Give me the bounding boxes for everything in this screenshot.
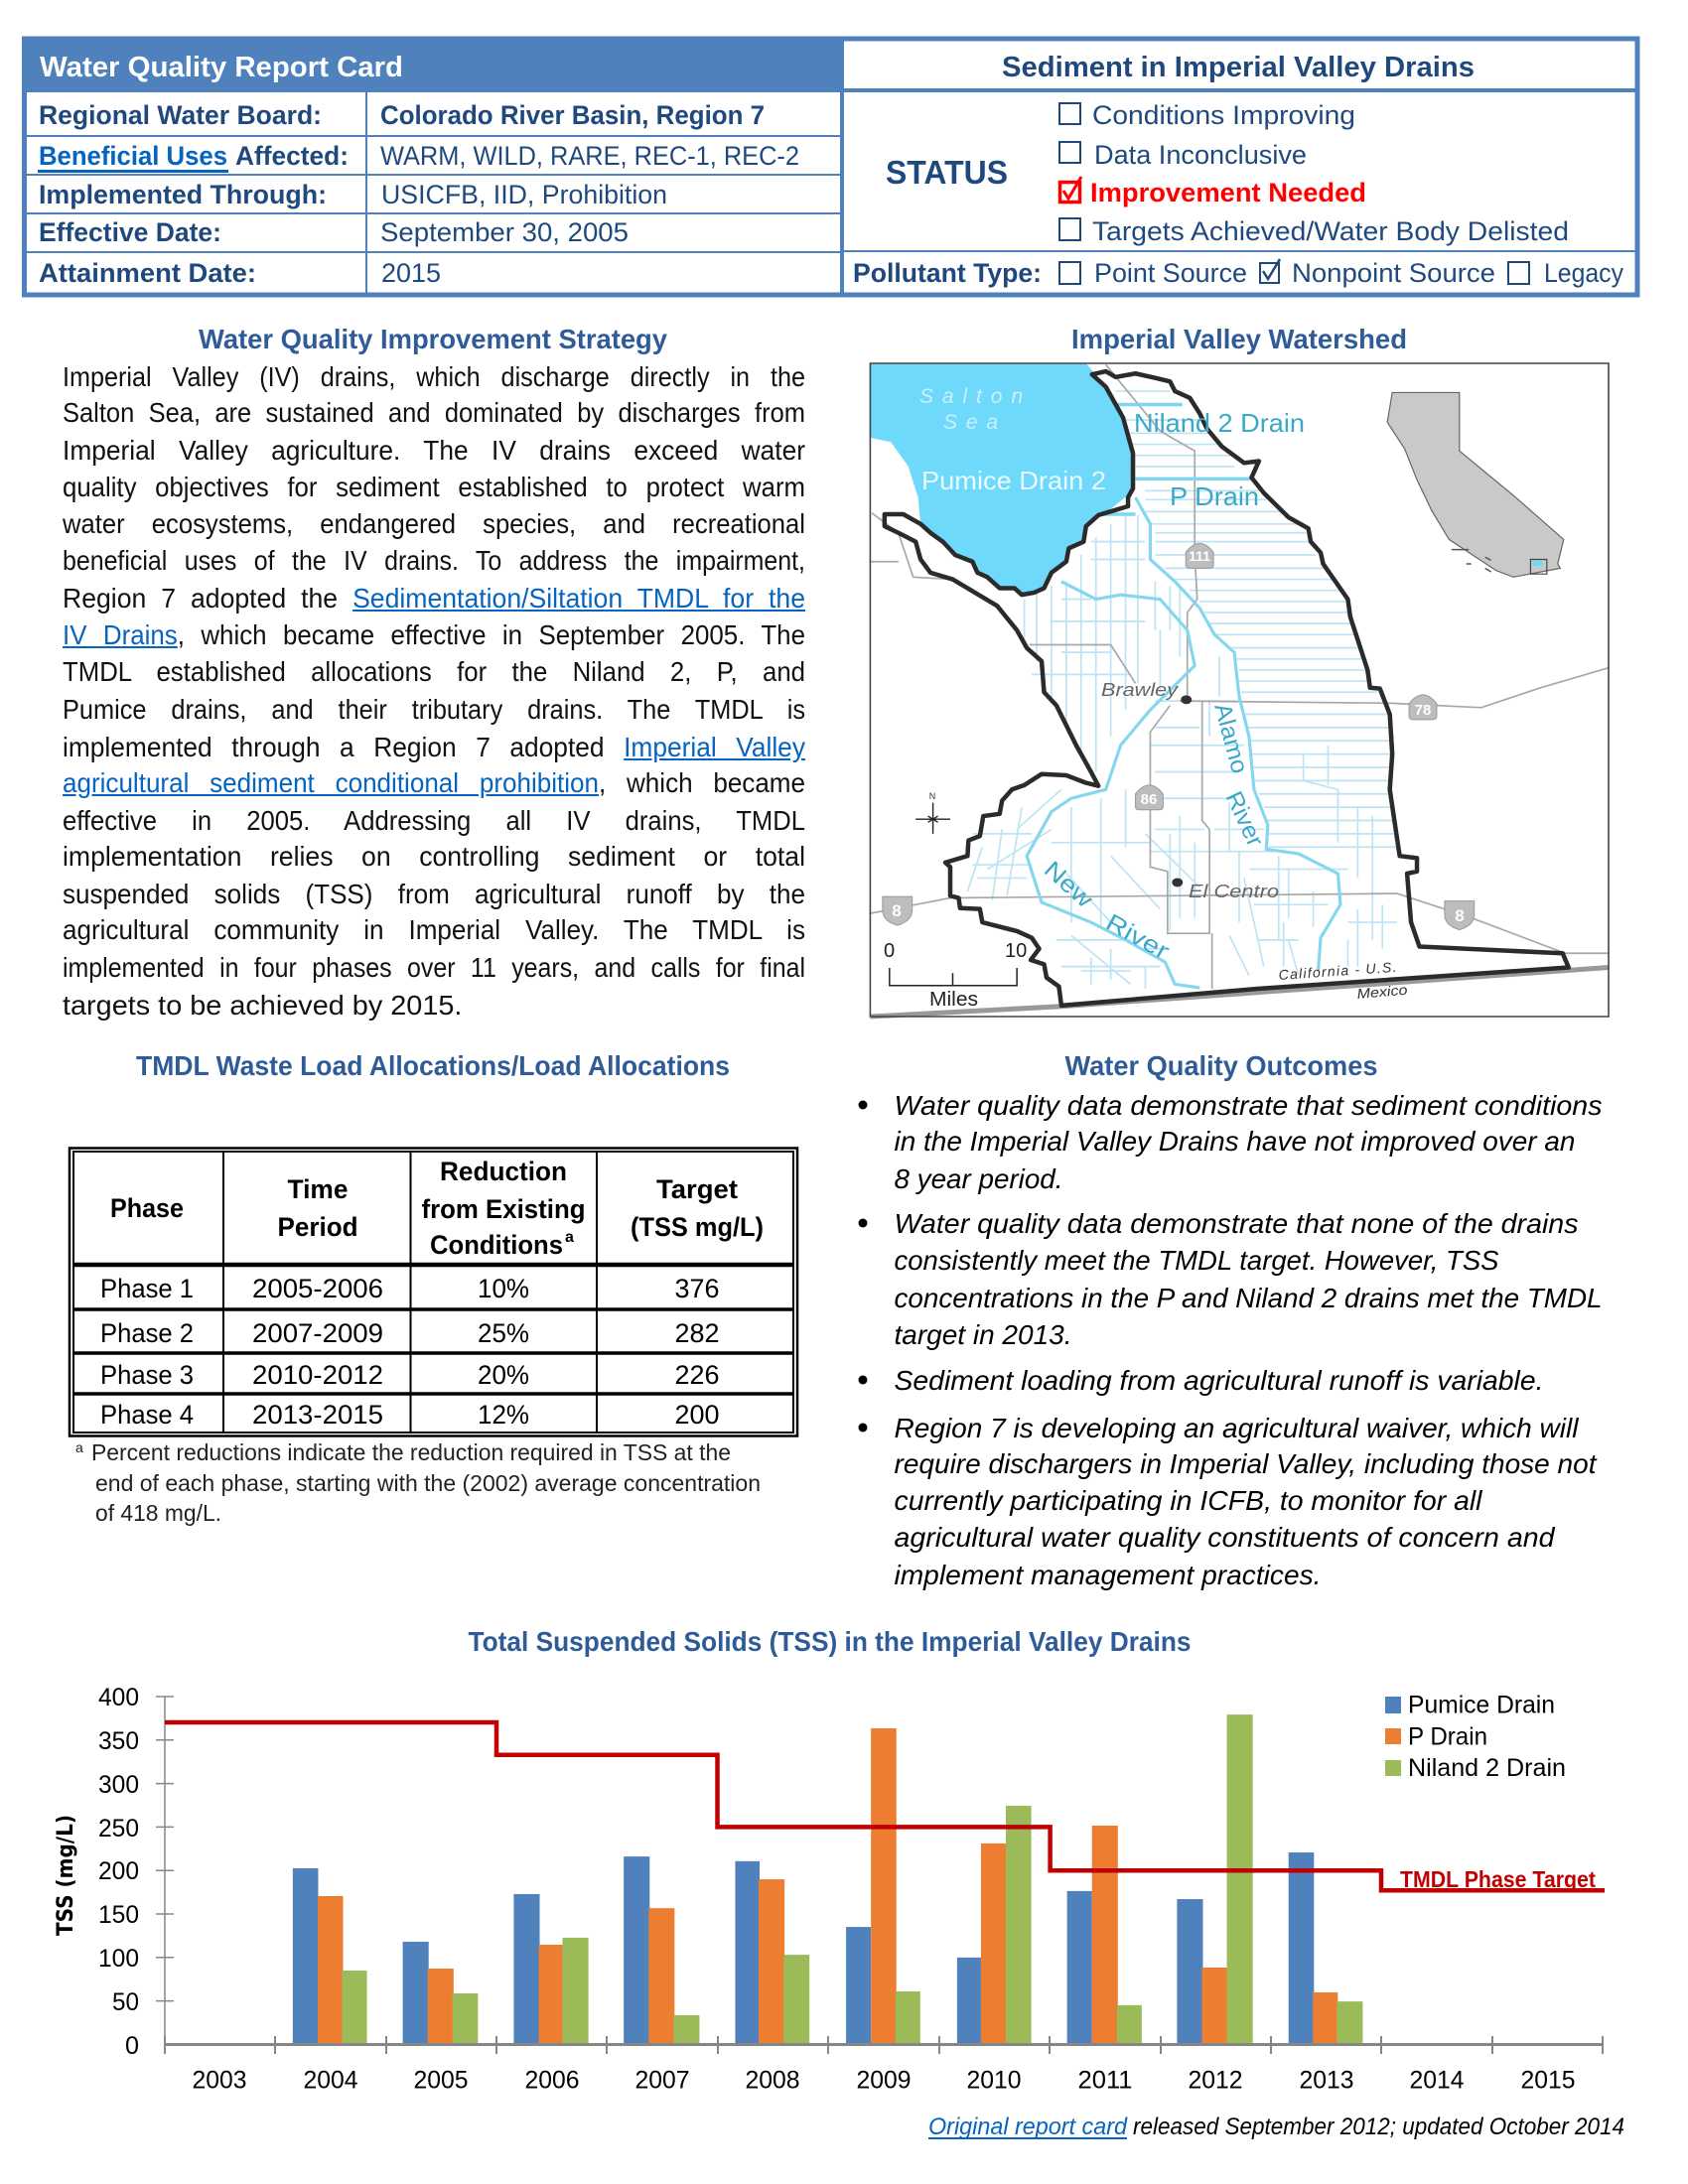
status options: Targets Achieved/Water Body Delisted (1092, 216, 1569, 246)
watershed map (870, 363, 1609, 1017)
map labels: Pumice Drain 2 (921, 466, 1106, 495)
outcome 4: Region 7 is developing an agricultural waiver, which will (894, 1413, 1579, 1443)
outcome 4: agricultural water quality constituents of concern and (894, 1522, 1556, 1553)
strategy body text: agricultural community in Imperial Valley. The TMDL is (63, 914, 805, 945)
outcome 4: implement management practices. (894, 1560, 1321, 1590)
details table: WARM, WILD, RARE, REC-1, REC-2 (380, 141, 799, 171)
map base drawing (870, 363, 1609, 1017)
border line (870, 968, 1609, 1017)
map labels (884, 385, 1465, 1011)
heading: watershed: Imperial Valley Watershed (1071, 324, 1407, 354)
map labels: Alamo (1208, 701, 1253, 776)
strategy body text: agricultural sediment conditional prohibition, which became (63, 767, 805, 798)
outcomes list (858, 1090, 1603, 1590)
y axis: 350 (98, 1727, 139, 1755)
table data rows: Phase 2 (100, 1318, 194, 1348)
x axis ticks (165, 2036, 1603, 2054)
table data rows: 226 (675, 1360, 719, 1390)
target line label: TMDL Phase Target (1400, 1866, 1596, 1892)
map labels: River (1220, 787, 1269, 851)
map labels: 78 (1415, 702, 1431, 719)
y axis: 0 (125, 2032, 139, 2060)
x axis year labels: 2009 (856, 2067, 912, 2095)
California inset (1387, 392, 1564, 577)
map labels: Mexico (1356, 982, 1408, 1002)
table header row: Target (656, 1174, 738, 1204)
status options: Data Inconclusive (1094, 140, 1307, 170)
details table: Effective Date: (39, 217, 221, 247)
x axis year labels (193, 2067, 1575, 2095)
pollutant type row: Legacy (1544, 258, 1623, 288)
y axis: 200 (98, 1857, 139, 1885)
footer note (928, 2114, 1624, 2140)
map labels: P Drain (1170, 481, 1259, 511)
y axis: 300 (98, 1771, 139, 1799)
x axis year labels: 2013 (1299, 2067, 1354, 2095)
heading: outcomes: Water Quality Outcomes (1064, 1050, 1378, 1081)
details table: Beneficial Uses (39, 141, 227, 171)
header panel: report card summary (22, 37, 1638, 297)
highlighted drains and rivers (1101, 404, 1251, 514)
details table: Regional Water Board: (39, 100, 322, 130)
table data rows: 25% (478, 1318, 529, 1348)
map frame (870, 363, 1609, 1017)
strategy body text: TMDL established allocations for the Niland 2, P, and (63, 656, 805, 687)
x axis year labels: 2003 (193, 2067, 246, 2095)
drains (967, 391, 1397, 989)
strategy body text: water ecosystems, endangered species, and recreational (63, 508, 805, 539)
chart legend (1385, 1692, 1566, 1782)
outcome 2: target in 2013. (894, 1319, 1072, 1350)
strategy body text: Imperial Valley (IV) drains, which discharge directly in the (63, 361, 805, 392)
status options: Conditions Improving (1092, 100, 1355, 130)
table data rows (100, 1274, 719, 1430)
outcome 2: concentrations in the P and Niland 2 drains met the TMDL (894, 1283, 1603, 1313)
outcome 2 (894, 1208, 1603, 1350)
strategy body text: Imperial Valley agriculture. The IV drains exceed water (63, 435, 805, 466)
table footnote: of 418 mg/L. (95, 1500, 221, 1526)
x axis year labels: 2010 (967, 2067, 1021, 2095)
report subject: Sediment in Imperial Valley Drains (1002, 52, 1475, 83)
table footnote: Percent reductions indicate the reduction required in TSS at the (91, 1439, 731, 1465)
footer note: released September 2012; updated October 2014 (1133, 2114, 1624, 2140)
map labels: El Centro (1189, 882, 1279, 901)
details table: September 30, 2005 (380, 217, 629, 247)
outcome 1: in the Imperial Valley Drains have not improved over an (894, 1126, 1575, 1157)
table data rows: 20% (478, 1360, 529, 1390)
chart legend: Pumice Drain (1408, 1692, 1555, 1719)
strategy body text: implemented through a Region 7 adopted Imperial Valley (63, 732, 805, 762)
x axis year labels: 2005 (413, 2067, 469, 2095)
table header row: a (565, 1229, 574, 1246)
scale bar (890, 968, 1017, 986)
details table: USICFB, IID, Prohibition (381, 180, 667, 209)
TMDL phase target line (165, 1722, 1605, 1890)
table data rows: 200 (675, 1400, 719, 1430)
footer note: Original report card (928, 2114, 1128, 2140)
header frame (24, 37, 1638, 297)
heading: allocations: TMDL Waste Load Allocations/Load Allocations (136, 1050, 730, 1081)
table grid (70, 1148, 797, 1435)
pollutant type row (853, 258, 1623, 288)
table header row: Reduction (440, 1157, 567, 1186)
map labels: 111 (1189, 548, 1210, 564)
strategy body text (63, 361, 805, 1021)
status options (1059, 100, 1569, 246)
x axis year labels: 2015 (1521, 2067, 1575, 2095)
chart legend: Niland 2 Drain (1408, 1754, 1566, 1782)
outcome 2: consistently meet the TMDL target. However, TSS (894, 1245, 1499, 1276)
TSS bar chart (54, 1684, 1605, 2095)
table footnote: a (75, 1439, 83, 1455)
strategy body text: Region 7 adopted the Sedimentation/Siltation TMDL for the (63, 583, 805, 614)
city dots (1181, 695, 1192, 704)
outcome 1: 8 year period. (894, 1163, 1062, 1194)
outcome 4: currently participating in ICFB, to monitor for all (894, 1485, 1482, 1516)
y axis title: TSS (mg/L) (54, 1815, 78, 1936)
table header row: (TSS mg/L) (631, 1212, 764, 1242)
outcome 3: Sediment loading from agricultural runoff is variable. (894, 1365, 1543, 1396)
table data rows: Phase 1 (100, 1274, 194, 1303)
strategy body text: Pumice drains, and their tributary drains. The TMDL is (63, 694, 805, 725)
x axis year labels: 2008 (745, 2067, 800, 2095)
table footnote (75, 1439, 761, 1526)
table header row (110, 1157, 764, 1260)
table data rows: 2007-2009 (252, 1318, 383, 1348)
table data rows: 2005-2006 (252, 1274, 383, 1303)
y axis: 150 (98, 1901, 139, 1929)
pollutant type row: Point Source (1094, 258, 1247, 288)
strategy body text: effective in 2005. Addressing all IV drains, TMDL (63, 805, 805, 836)
strategy body text: quality objectives for sediment established to protect warm (63, 472, 805, 502)
x axis (165, 2043, 1603, 2046)
bullets (858, 1100, 868, 1432)
strategy body text: targets to be achieved by 2015. (63, 990, 462, 1021)
watershed boundary (885, 371, 1569, 1006)
strategy body text: Salton Sea, are sustained and dominated by discharges from (63, 397, 805, 428)
outcome 1: Water quality data demonstrate that sediment conditions (894, 1090, 1603, 1121)
outcome 1 (894, 1090, 1603, 1194)
strategy body text: implemented in four phases over 11 years, and calls for final (63, 952, 805, 983)
chart legend: P Drain (1408, 1723, 1487, 1751)
x axis year labels: 2007 (635, 2067, 689, 2095)
map labels: N (929, 791, 935, 801)
map labels: New (1039, 856, 1098, 913)
map labels: Miles (929, 989, 978, 1011)
table data rows: 282 (675, 1318, 719, 1348)
y axis: 50 (112, 1988, 139, 2016)
table data rows: 10% (478, 1274, 529, 1303)
table data rows: 376 (675, 1274, 719, 1303)
map labels: River (1101, 909, 1174, 965)
x axis year labels: 2011 (1078, 2067, 1132, 2095)
table data rows: Phase 4 (100, 1400, 194, 1430)
details table: Attainment Date: (39, 258, 256, 288)
table header row: from Existing (421, 1194, 586, 1224)
map labels: 86 (1141, 791, 1157, 808)
pollutant type row: Pollutant Type: (853, 258, 1042, 288)
y axis: 400 (98, 1684, 139, 1711)
bars 2009 to 2013 (846, 1714, 1362, 2044)
table header row: Time (288, 1174, 348, 1204)
table header row: Phase (110, 1193, 184, 1223)
map labels: Niland 2 Drain (1134, 408, 1305, 438)
allocations table (70, 1148, 797, 1435)
Salton Sea (870, 363, 1133, 595)
x axis year labels: 2004 (304, 2067, 358, 2095)
strategy body text: suspended solids (TSS) from agricultural runoff by the (63, 879, 805, 909)
header band (22, 37, 843, 92)
x axis year labels: 2014 (1410, 2067, 1465, 2095)
outcome 4: require dischargers in Imperial Valley, including those not (894, 1448, 1598, 1479)
details table: Affected: (235, 141, 349, 171)
table data rows: 12% (478, 1400, 529, 1430)
details table: Colorado River Basin, Region 7 (380, 100, 765, 130)
bars 2004 to 2008 (293, 1856, 809, 2044)
strategy body text: implementation relies on controlling sediment or total (63, 841, 805, 872)
table footnote: end of each phase, starting with the (2002) average concentration (95, 1470, 761, 1496)
outcome 4 (894, 1413, 1598, 1590)
title: Water Quality Report Card (40, 52, 403, 83)
table data rows: 2010-2012 (252, 1360, 383, 1390)
map labels: 8 (1455, 906, 1465, 925)
strategy body text: IV Drains, which became effective in September 2005. The (63, 619, 805, 650)
north arrow (915, 803, 950, 834)
heading: strategy: Water Quality Improvement Strategy (199, 324, 667, 354)
map labels: Sea (943, 411, 998, 434)
map labels: 8 (892, 901, 902, 920)
status label: STATUS (886, 154, 1008, 191)
roads (870, 364, 1609, 989)
x axis year labels: 2006 (524, 2067, 580, 2095)
y axis: 250 (98, 1815, 139, 1843)
table header row: Conditions (430, 1230, 563, 1260)
outcome 2: Water quality data demonstrate that none of the drains (894, 1208, 1579, 1239)
pollutant type row: Nonpoint Source (1292, 258, 1495, 288)
y axis: 100 (98, 1945, 139, 1973)
y axis (98, 1684, 174, 2060)
map labels: 0 (884, 940, 895, 962)
heading: chart: Total Suspended Solids (TSS) in the Imperial Valley Drains (469, 1626, 1192, 1657)
map labels: 10 (1005, 940, 1027, 962)
highway shields (883, 543, 1475, 930)
map labels: Brawley (1101, 680, 1179, 700)
details table (38, 100, 799, 288)
x axis year labels: 2012 (1188, 2067, 1243, 2095)
table data rows: Phase 3 (100, 1360, 194, 1390)
map labels: Salton (919, 385, 1023, 408)
strategy body text: beneficial uses of the IV drains. To address the impairment, (63, 545, 805, 576)
details table: 2015 (381, 258, 441, 288)
status options: Improvement Needed (1090, 178, 1366, 207)
details table: Implemented Through: (39, 180, 327, 209)
table data rows: 2013-2015 (252, 1400, 383, 1430)
map labels: California - U.S. (1278, 959, 1397, 983)
table header row: Period (278, 1212, 357, 1242)
